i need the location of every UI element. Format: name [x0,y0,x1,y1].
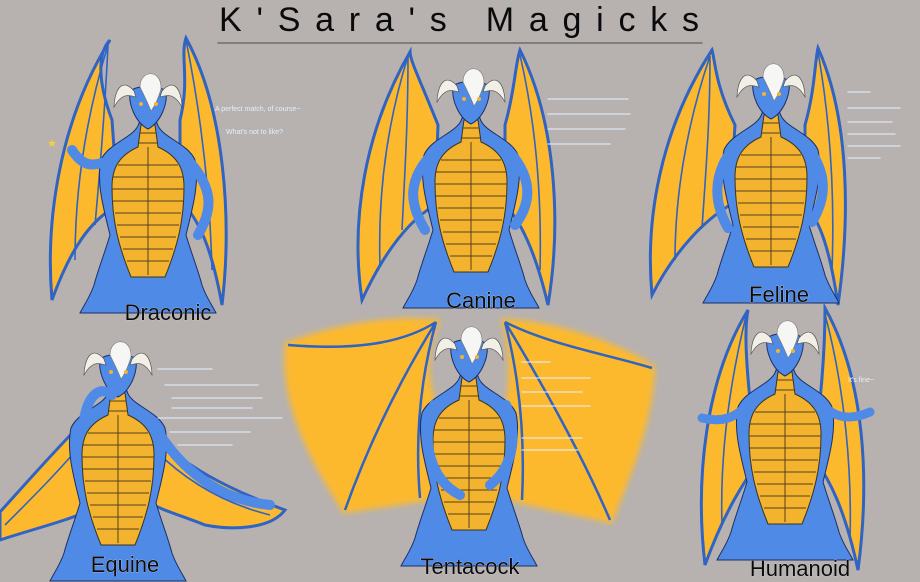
panel: Tentacock [287,321,652,579]
caption [215,106,300,136]
dragon figure [401,327,537,566]
label: Tentacock [420,554,521,579]
dragon figure [80,74,216,313]
arms [717,145,823,228]
caption: What's not to like? [226,129,283,136]
label: Humanoid [750,556,850,581]
arms [428,405,513,495]
wings [287,321,652,520]
title: K'Sara's Magicks [219,1,699,39]
label: Feline [749,282,809,307]
panel: Humanoid [701,308,874,581]
panel: Equine [0,342,285,581]
caption placeholder [522,362,590,450]
label: Equine [91,552,159,577]
caption: A perfect match, of course~ [215,106,300,113]
arms [702,402,870,420]
panel: Canine [358,50,630,313]
dragon figure [403,69,539,308]
label: Draconic [125,300,211,325]
caption: It's fine~ [848,377,874,384]
label: Canine [446,288,516,313]
wings [0,420,285,540]
subtitle placeholder [218,42,702,44]
wings [650,48,845,305]
caption placeholder [848,92,900,158]
panel: Draconic [47,38,300,325]
arms [84,391,270,505]
wings [50,38,226,305]
arms [72,150,208,235]
caption placeholder [158,369,282,445]
icon: star: ★ [47,138,57,150]
arms [413,150,527,230]
dragon figure [717,321,853,560]
panel: Feline [650,48,900,307]
dragon figure [50,342,186,581]
dragon figure [703,64,839,303]
caption placeholder [548,99,630,144]
wings [701,308,864,570]
wings [358,50,555,305]
